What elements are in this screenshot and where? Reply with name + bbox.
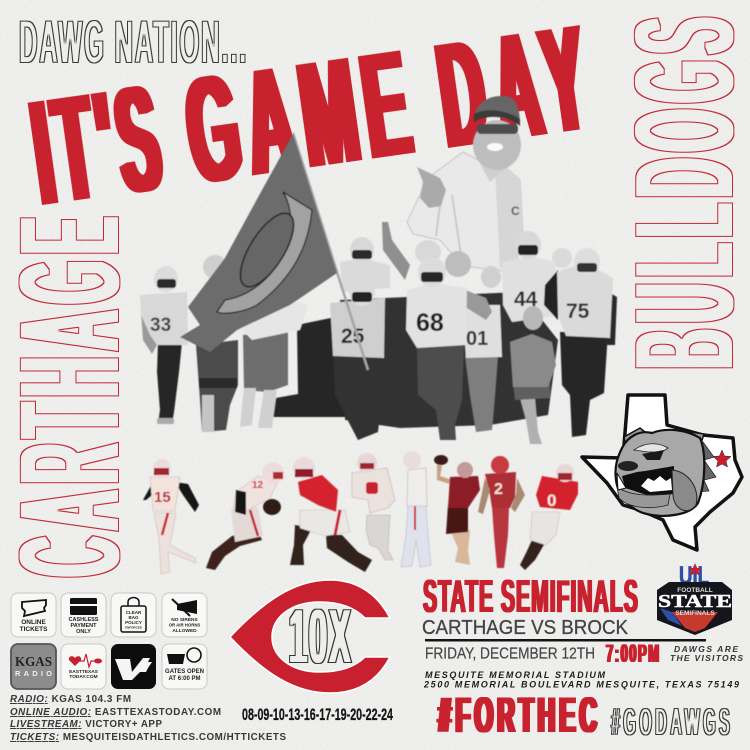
player 8 [290, 457, 372, 572]
helmet [481, 266, 501, 288]
arm [141, 312, 157, 354]
white pants [300, 510, 350, 536]
visitors note [670, 644, 743, 663]
arms [478, 478, 525, 514]
badge line one: FOOTBALL [677, 587, 713, 594]
game date: FRIDAY, DECEMBER 12TH [425, 646, 595, 662]
player with raised arm [340, 222, 410, 292]
jersey [536, 476, 578, 510]
text: AT 6:00 PM [169, 676, 200, 682]
venue [423, 670, 739, 690]
shorts [513, 382, 550, 400]
helmet [403, 451, 421, 469]
football [434, 455, 448, 465]
helmet [415, 240, 441, 264]
number: 25 [341, 325, 365, 348]
number: 01 [466, 328, 488, 350]
dog nose [618, 461, 638, 471]
badge line two: STATE [658, 591, 732, 611]
10X: 10X [289, 593, 351, 680]
text: TODAY.COM [69, 674, 98, 680]
card [70, 598, 97, 615]
background helmets [415, 240, 572, 288]
tile [11, 644, 56, 689]
text: ENFORCED [125, 626, 143, 630]
head [523, 306, 543, 330]
player 4 [352, 453, 395, 560]
heart [69, 656, 81, 666]
jersey [406, 283, 467, 348]
helmet [357, 453, 377, 473]
title: It's Game Day: DAY [429, 0, 596, 180]
mask [421, 272, 443, 282]
helmet [203, 255, 227, 279]
heart and pulse [72, 654, 94, 667]
Texas outline [582, 395, 742, 550]
jersey [462, 305, 502, 358]
UIL state semifinals badge [657, 562, 732, 635]
mask [360, 463, 374, 469]
tickets line: TICKETS: MESQUITEISDATHLETICS.COM/HTTICKETS [10, 732, 286, 743]
text: CLEAR [126, 610, 142, 615]
black sleeves [143, 482, 199, 512]
sleeve [544, 270, 558, 320]
helmet [574, 248, 600, 276]
tile [111, 593, 156, 637]
coach face [473, 120, 521, 170]
sock [202, 395, 214, 432]
mask [352, 292, 372, 302]
coach hand [417, 167, 446, 208]
card stripe [70, 604, 97, 606]
jersey [340, 258, 390, 292]
number: 68 [416, 309, 444, 337]
bulldog Texas mascot [582, 395, 742, 550]
divider [425, 639, 706, 642]
player 33 [140, 266, 188, 424]
livestream line: LIVESTREAM: VICTORY+ APP [10, 719, 162, 730]
mask [352, 250, 372, 259]
coach cap [474, 96, 520, 124]
icon: cashless [61, 593, 106, 637]
shorts [446, 505, 468, 534]
jersey [407, 468, 427, 506]
legs [333, 355, 382, 440]
flag [180, 134, 337, 352]
jersey [150, 477, 180, 511]
football [263, 499, 281, 515]
helmet [349, 278, 375, 306]
dog ears [624, 428, 704, 446]
icon: Victory+ [111, 644, 156, 689]
number: 15 [154, 489, 171, 506]
bag [121, 606, 146, 632]
icon: KGAS radio [11, 644, 56, 689]
kid runner [510, 306, 556, 444]
flag cloth [180, 134, 337, 352]
championship years: 08-09-10-13-16-17-19-20-22-24 [242, 705, 393, 724]
clock [187, 648, 201, 662]
tile [11, 593, 56, 637]
knee wrap [199, 378, 237, 388]
venue name: MESQUITE MEMORIAL STADIUM [425, 670, 606, 680]
tile [111, 644, 156, 689]
icon: no sirens [162, 593, 207, 637]
collar spikes [698, 442, 716, 492]
text: BAG [128, 615, 139, 620]
helmet [350, 237, 374, 263]
text: ALLOWED [172, 628, 197, 634]
title: It's Game Day: IT'S [23, 55, 169, 238]
stadium [167, 654, 185, 664]
legs [206, 530, 262, 570]
venue address: 2500 MEMORIAL BOULEVARD MESQUITE, TEXAS 75149 [423, 680, 739, 690]
badge line three: SEMIFINALS [675, 610, 715, 617]
background crowd [340, 292, 558, 428]
audio line: ONLINE AUDIO: EASTTEXASTODAY.COM [10, 707, 221, 718]
coach sunglasses [477, 124, 518, 134]
title: It's Game Day: GAME [177, 19, 419, 216]
coach polo [407, 152, 523, 272]
mask [577, 263, 597, 272]
text: OR AIR HORNS [169, 622, 200, 628]
helmet [293, 457, 315, 479]
tile [61, 593, 106, 637]
mask [157, 279, 176, 288]
team photo [140, 133, 617, 444]
helmet [154, 266, 178, 292]
helmet [153, 459, 171, 477]
star [713, 450, 731, 467]
flag C inner [230, 205, 304, 295]
handle [128, 598, 139, 606]
text: TICKETS [20, 626, 48, 633]
helmet [491, 456, 509, 474]
player 2 [196, 255, 238, 432]
helmet [418, 257, 446, 287]
number: 75 [566, 300, 590, 323]
number: 44 [514, 288, 538, 311]
dog brow [634, 444, 668, 452]
player 68 [406, 257, 492, 440]
C logo with 10X [230, 580, 390, 693]
player 12 [206, 462, 284, 570]
red stripe [335, 510, 340, 535]
legs [520, 398, 542, 444]
heading: Dawg Nation: DAWG NATION... [19, 8, 246, 76]
red stripe [250, 510, 258, 536]
dog jowl [672, 470, 697, 511]
V logo [115, 658, 152, 680]
pants [243, 330, 288, 392]
player 2 standing [478, 456, 525, 568]
text: KGAS [15, 655, 52, 670]
mask [295, 469, 313, 477]
arm [605, 290, 617, 345]
number: 2 [494, 481, 503, 498]
line one: DAWGS ARE [674, 644, 738, 654]
radio line: RADIO: KGAS 104.3 FM [10, 694, 131, 705]
title: It's Game Day [23, 0, 596, 238]
jersey [140, 292, 188, 345]
mask [558, 473, 572, 480]
red stripes [162, 513, 168, 535]
cap brim [474, 110, 520, 126]
hashtag: For The C: #FORTHEC [438, 689, 597, 743]
legs [401, 505, 431, 567]
legs [520, 540, 545, 570]
flag pole [293, 133, 368, 370]
text: ONLINE [21, 619, 46, 626]
mask [518, 245, 538, 255]
tile [61, 644, 106, 689]
white pants [530, 512, 560, 545]
text: RADIO [15, 669, 52, 678]
player 75 [544, 248, 617, 437]
arm [437, 464, 452, 484]
tile [162, 644, 207, 689]
text: NO SIRENS [171, 617, 198, 623]
number: 12 [252, 480, 264, 491]
legs [417, 342, 464, 440]
helmet [515, 231, 541, 259]
icon: East Texas Today [61, 644, 106, 689]
football [94, 658, 102, 664]
text: ONLY [76, 629, 91, 635]
text: CASHLESS [69, 617, 99, 623]
action players row [143, 451, 578, 574]
jersey [448, 476, 480, 508]
flag C ring [217, 192, 312, 313]
dark center group [273, 315, 345, 417]
helmet [457, 462, 473, 478]
text: POLICY [125, 620, 142, 625]
white pants [231, 507, 263, 542]
football [672, 612, 718, 632]
jersey [502, 256, 556, 322]
shoes [157, 418, 174, 424]
player 25 [330, 278, 385, 440]
jersey [233, 476, 277, 510]
coach shading [495, 164, 523, 270]
dog lower jaw [617, 487, 670, 508]
icon: gates open [162, 644, 207, 689]
text: EASTTEXAS [69, 669, 99, 675]
mask [154, 468, 169, 475]
red stripe [414, 505, 416, 530]
legs [196, 340, 238, 432]
text: PAYMENT [71, 623, 97, 629]
tile [162, 593, 207, 637]
slash [172, 599, 190, 616]
legs [450, 530, 470, 565]
coach logo: C [511, 204, 520, 218]
legs [157, 342, 182, 424]
player QB [434, 455, 480, 565]
jersey [240, 300, 308, 340]
icon: online tickets [11, 593, 56, 637]
helmet [262, 462, 284, 484]
player 01 [462, 305, 502, 432]
gloves [366, 482, 378, 494]
socks [240, 388, 277, 428]
dark arm [235, 490, 246, 515]
text: GATES OPEN [165, 669, 204, 675]
legs [366, 515, 393, 560]
star [688, 563, 702, 576]
player 44 [502, 231, 556, 322]
coach neck [478, 160, 503, 182]
arm [460, 288, 492, 320]
legs [492, 507, 509, 568]
white legs [154, 513, 196, 574]
dog teeth [641, 476, 672, 492]
shield [657, 582, 732, 635]
blue stripe [660, 608, 682, 626]
number: 0 [547, 491, 556, 510]
jersey [298, 475, 338, 512]
sleeve fold [436, 195, 462, 262]
horn [177, 600, 197, 614]
player 5 [401, 451, 431, 567]
UIL letters: UIL [679, 562, 709, 590]
shirt [510, 334, 556, 387]
mask [273, 472, 283, 479]
dog mouth [622, 466, 674, 496]
player 15 [143, 459, 199, 574]
hashtag: Go Dawgs: #GODAWGS [611, 701, 730, 744]
player 0 [520, 464, 578, 570]
C mark [230, 580, 390, 693]
legs [560, 332, 608, 437]
game heading: STATE SEMIFINALS [423, 571, 638, 622]
ticket [22, 600, 46, 616]
game time: 7:00PM [606, 641, 659, 668]
jersey [352, 468, 395, 513]
jersey [330, 298, 385, 358]
info icons grid [11, 593, 207, 689]
helmet [556, 464, 574, 482]
helmet [552, 248, 572, 268]
legs [465, 355, 498, 432]
jersey [557, 262, 613, 338]
jersey [485, 472, 516, 508]
matchup: CARTHAGE VS BROCK [422, 617, 629, 639]
dog head [615, 430, 704, 516]
number: 33 [150, 315, 171, 336]
icon: clear bag [111, 593, 156, 637]
dog fang [617, 473, 626, 490]
coach smile [487, 143, 503, 151]
legs [290, 525, 372, 572]
player 3 [240, 300, 308, 428]
line two: THE VISITORS [670, 653, 743, 663]
coach photo [407, 96, 523, 272]
broadcast info [10, 694, 286, 743]
dog eye [642, 450, 664, 460]
arm [382, 222, 410, 280]
helmet [445, 251, 471, 277]
